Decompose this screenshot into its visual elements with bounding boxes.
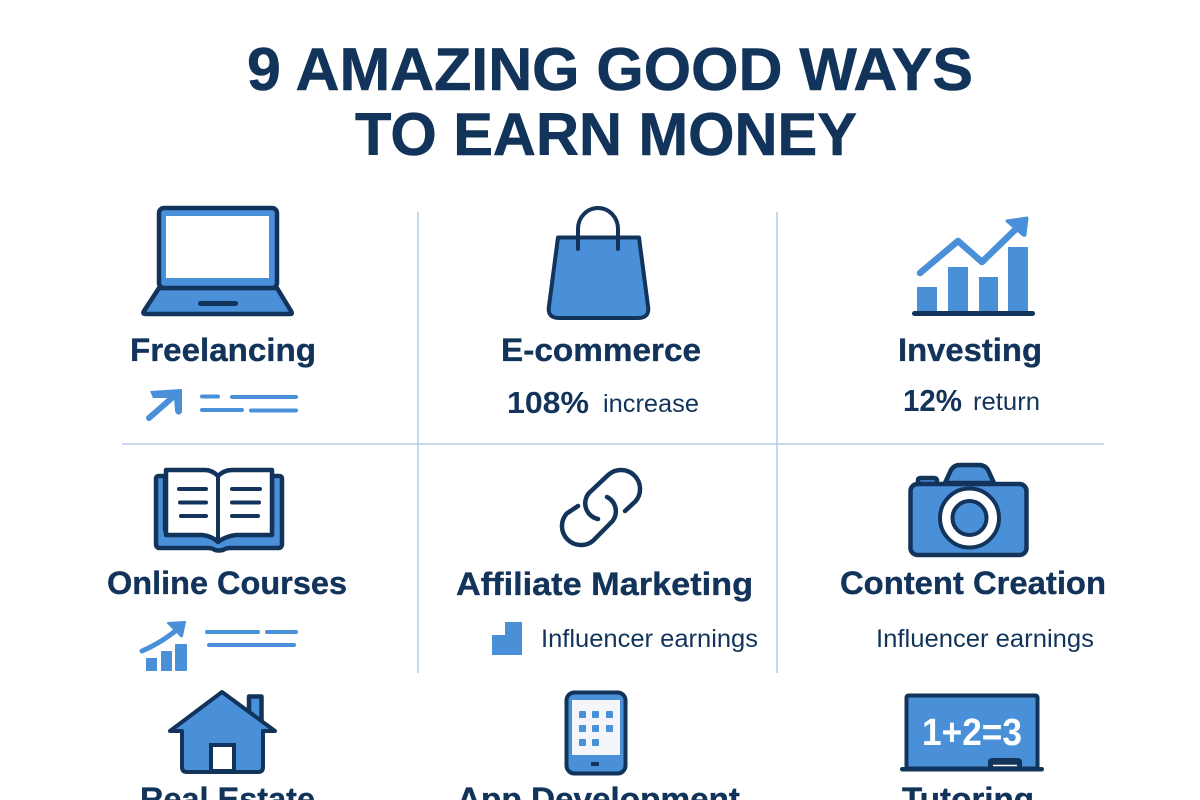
label: influencer earnings: Influencer earnings	[541, 625, 758, 653]
label: influencer earnings: Influencer earnings	[876, 625, 1094, 653]
panel: affiliate marketing	[456, 470, 758, 655]
stat: 108% increase: increase	[603, 390, 699, 418]
heading: investing: Investing	[898, 332, 1042, 368]
heading: online courses: Online Courses	[107, 565, 347, 601]
heading: e-commerce: E-commerce	[501, 332, 701, 368]
stat: 12% return: 12%	[903, 383, 962, 418]
panel: app development	[457, 692, 740, 800]
panel: online courses	[107, 470, 347, 671]
stat: 108% increase: 108%	[507, 385, 589, 420]
icon: camera	[910, 465, 1026, 555]
stat: 12% return	[903, 383, 1040, 418]
icon: bar chart with arrow	[912, 218, 1035, 316]
icon: chain link	[562, 470, 640, 545]
icon: shopping bag	[549, 208, 648, 318]
icon: house	[170, 692, 275, 772]
title: TO EARN MONEY	[355, 101, 857, 168]
panel: investing	[898, 218, 1042, 418]
icon: chalkboard: 1+2=3	[922, 712, 1022, 754]
icon: chalkboard	[900, 696, 1044, 772]
icon: mini bars	[492, 622, 522, 655]
icon: open book	[156, 470, 282, 550]
title	[247, 36, 973, 168]
title: 9 AMAZING GOOD WAYS	[247, 36, 973, 103]
stat: 108% increase	[507, 385, 699, 420]
icon: growth arrow and text lines	[149, 389, 296, 418]
heading: affiliate marketing: Affiliate Marketing	[456, 566, 753, 602]
icon: laptop	[143, 208, 292, 314]
panel: content creation	[840, 465, 1106, 653]
heading: content creation: Content Creation	[840, 565, 1106, 601]
panel: freelancing	[130, 208, 316, 418]
panel: tutoring	[900, 696, 1044, 800]
panel: real estate	[140, 692, 315, 800]
panel: e-commerce	[501, 208, 701, 420]
icon: tablet	[566, 692, 626, 774]
icon: mini chart and text lines	[142, 622, 296, 671]
heading: freelancing: Freelancing	[130, 332, 316, 368]
stat: 12% return: return	[973, 388, 1040, 416]
